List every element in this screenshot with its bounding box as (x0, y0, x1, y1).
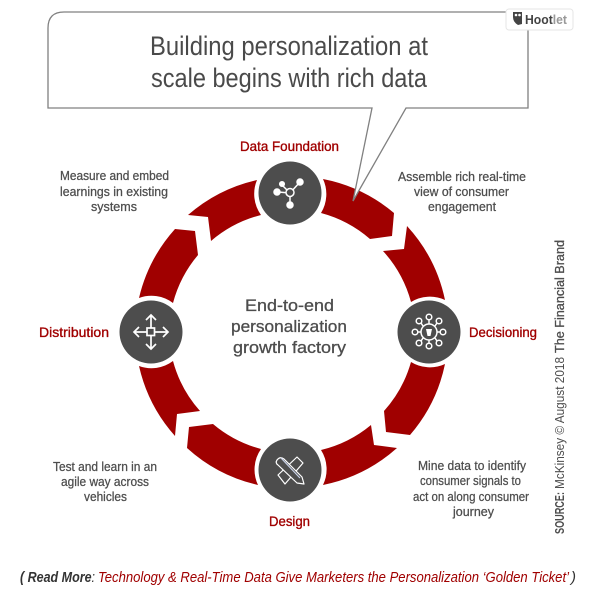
icon: network (274, 179, 303, 208)
read more link: ) (569, 569, 576, 586)
title (150, 31, 428, 93)
center text: personalization (231, 317, 347, 336)
text: mine data: journey (452, 505, 495, 519)
text: test and learn: agile way across (61, 475, 149, 489)
title: Building personalization at (150, 31, 428, 61)
text: mine data: act on along consumer (413, 490, 529, 504)
ring segment: right bottom (384, 362, 445, 435)
label: data foundation: Data Foundation (240, 138, 339, 154)
text: test and learn: vehicles (84, 490, 127, 504)
Hootlet badge (506, 9, 573, 30)
read more link: ( Read More: (20, 569, 95, 586)
source credit: SOURCE: (553, 492, 567, 534)
badge wordmark: Hootlet (525, 13, 568, 27)
center text: End-to-end (245, 296, 334, 315)
text: measure and embed: systems (91, 200, 137, 214)
ring segment: bottom left (187, 424, 261, 485)
icon: four-way arrows (134, 315, 168, 349)
node: decisioning (398, 300, 460, 364)
text: mine data (413, 459, 529, 519)
title: scale begins with rich data (151, 63, 428, 93)
text: test and learn (53, 460, 157, 504)
ring segment: left top (139, 229, 198, 303)
label: decisioning: Decisioning (469, 324, 537, 340)
node: design (258, 438, 322, 502)
source credit (553, 240, 567, 534)
icon: owl (513, 12, 522, 25)
text: mine data: consumer signals to (420, 474, 521, 488)
text: assemble: Assemble rich real-time (398, 170, 526, 184)
callout bubble (48, 12, 528, 201)
icon: pencil and ruler (276, 457, 304, 484)
ring segment: left bottom (139, 361, 200, 436)
label: design: Design (269, 513, 310, 529)
center text (231, 296, 347, 357)
text: mine data: Mine data to identify (418, 459, 527, 473)
source credit: The Financial Brand (553, 240, 567, 353)
text: measure and embed: Measure and embed (60, 169, 169, 183)
ring segment: top right (321, 179, 394, 239)
text: measure and embed: learnings in existing (60, 185, 168, 199)
source credit: McKinsey © August 2018 (553, 357, 567, 489)
text: measure and embed (60, 169, 169, 214)
label: distribution: Distribution (39, 324, 109, 340)
icon: people network (412, 314, 446, 349)
growth factory ring (139, 179, 445, 485)
text: test and learn: Test and learn in an (53, 460, 157, 474)
text: assemble: engagement (428, 200, 497, 214)
center text: growth factory (233, 338, 347, 357)
ring segment: top left (188, 180, 261, 241)
node: data foundation (258, 162, 322, 224)
text: assemble: view of consumer (414, 185, 509, 199)
text: assemble (398, 170, 526, 214)
ring segment: bottom right (321, 425, 397, 485)
ring segment: right top (383, 226, 445, 302)
node: distribution (120, 300, 182, 364)
